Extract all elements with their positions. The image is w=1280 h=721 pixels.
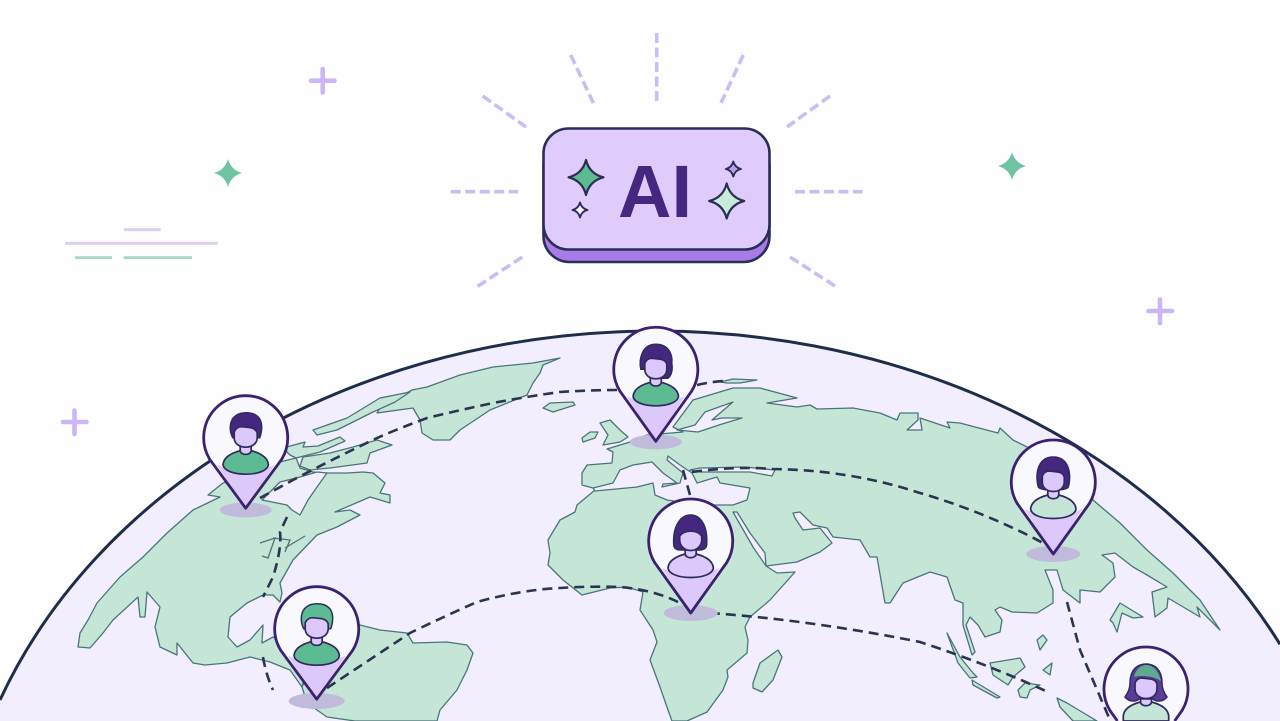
pin: Europe [614, 327, 698, 441]
Great Lakes [260, 536, 305, 558]
Sulawesi [1018, 683, 1040, 698]
Hudson Bay [262, 472, 327, 515]
green hair cap [1134, 665, 1161, 681]
Canadian archipelago [283, 437, 345, 458]
Svalbard [720, 379, 757, 383]
New Guinea [1057, 698, 1097, 721]
Eurasia and Africa [548, 388, 1220, 721]
AI button [544, 128, 770, 262]
pin: Central America [275, 587, 359, 699]
globe outline [0, 331, 1280, 700]
globe [0, 331, 1280, 721]
Java [972, 680, 1000, 698]
Ireland [582, 432, 598, 442]
dashed routes [260, 381, 1110, 720]
globe disc [0, 331, 1280, 721]
Baffin island [300, 440, 392, 470]
sparkle: large green [568, 160, 604, 195]
radiating rays [451, 33, 863, 288]
AI label: AI [618, 150, 692, 233]
speed lines [65, 230, 218, 258]
Japan [1110, 603, 1143, 632]
pin: Africa [649, 499, 733, 613]
button base [544, 140, 770, 262]
decorative marks [63, 69, 1172, 434]
pin: North America [204, 396, 288, 508]
sparkle: green left [214, 159, 242, 187]
sparkle: green right [998, 152, 1026, 180]
sparkle: large pale [709, 184, 744, 218]
Philippines [1037, 635, 1047, 650]
button face [544, 128, 770, 250]
North America [78, 458, 390, 687]
pin shadows [220, 434, 1080, 709]
plus: top left [311, 69, 334, 92]
Britain [600, 420, 628, 445]
sparkle: small lavender [726, 162, 741, 176]
Arctic islands [313, 392, 410, 435]
South America [300, 625, 473, 721]
Iceland [543, 402, 575, 412]
Madagascar [753, 650, 782, 692]
Greenland [377, 358, 560, 440]
pin: Oceania [1104, 647, 1188, 721]
Black Sea [690, 467, 775, 476]
Mediterranean Sea [593, 456, 750, 505]
Baltic Sea [677, 402, 742, 432]
Borneo [990, 658, 1025, 685]
Moluccas [1043, 663, 1052, 675]
Sumatra [947, 633, 977, 678]
sparkle: small white [572, 202, 588, 218]
pin: Asia [1011, 440, 1095, 554]
plus: right [1148, 300, 1172, 323]
plus: left [63, 410, 86, 434]
continents [78, 358, 1220, 721]
